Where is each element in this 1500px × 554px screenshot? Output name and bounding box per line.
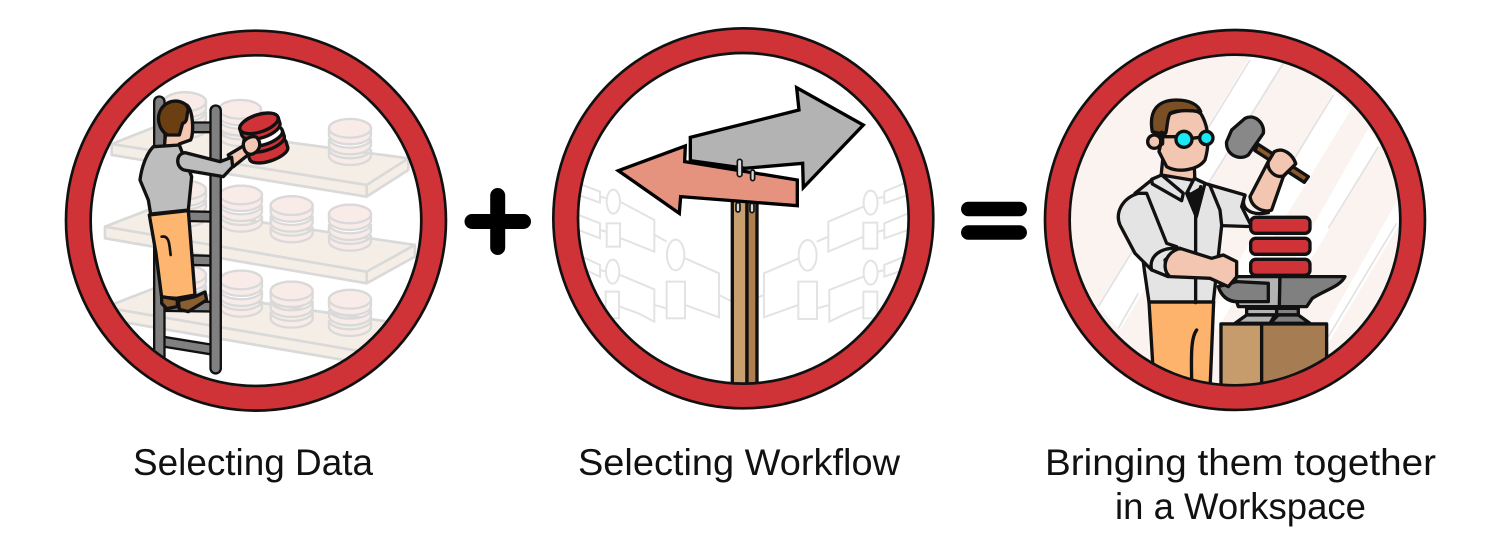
hammer (1227, 117, 1308, 182)
equals sign (968, 209, 1020, 232)
trousers (149, 211, 195, 298)
label: workspace: Bringing them together (1045, 442, 1436, 483)
neck (1161, 160, 1195, 182)
anvil (1218, 277, 1345, 323)
panel: selecting workflow (566, 41, 921, 396)
sleeve (178, 153, 233, 177)
blacksmith (1118, 100, 1345, 390)
glasses (1162, 131, 1213, 147)
torso (140, 145, 192, 214)
shelves and database stacks (105, 92, 415, 364)
grey arrow pointing right (690, 88, 863, 188)
raised forearm (1250, 152, 1296, 211)
signpost (732, 197, 757, 387)
red ring (1057, 42, 1413, 398)
red ring (566, 41, 921, 396)
shoes (162, 297, 177, 309)
striped background (1068, 53, 1402, 387)
head and neck (164, 105, 193, 152)
panel: workspace (1057, 42, 1413, 398)
plus sign (472, 196, 524, 248)
climbing person (140, 101, 290, 312)
head (1159, 110, 1208, 170)
panel: selecting data (78, 43, 434, 398)
shirt (1135, 175, 1252, 302)
held red database (237, 109, 290, 167)
label: selecting workflow: Selecting Workflow (578, 442, 900, 483)
sign clips (736, 159, 755, 213)
ladder (159, 102, 216, 368)
hair (158, 101, 188, 135)
salmon arrow pointing left (618, 146, 797, 213)
label: workspace: in a Workspace (1115, 486, 1366, 527)
wooden block (1221, 324, 1327, 387)
label: selecting data: Selecting Data (133, 442, 373, 483)
hair (1151, 100, 1201, 133)
trousers (1149, 302, 1214, 390)
forearm and fist (1165, 248, 1237, 287)
forearm (228, 145, 250, 167)
red blocks (1251, 217, 1310, 275)
workflow diagrams (578, 182, 908, 322)
red ring (78, 43, 434, 398)
fist (243, 137, 260, 154)
